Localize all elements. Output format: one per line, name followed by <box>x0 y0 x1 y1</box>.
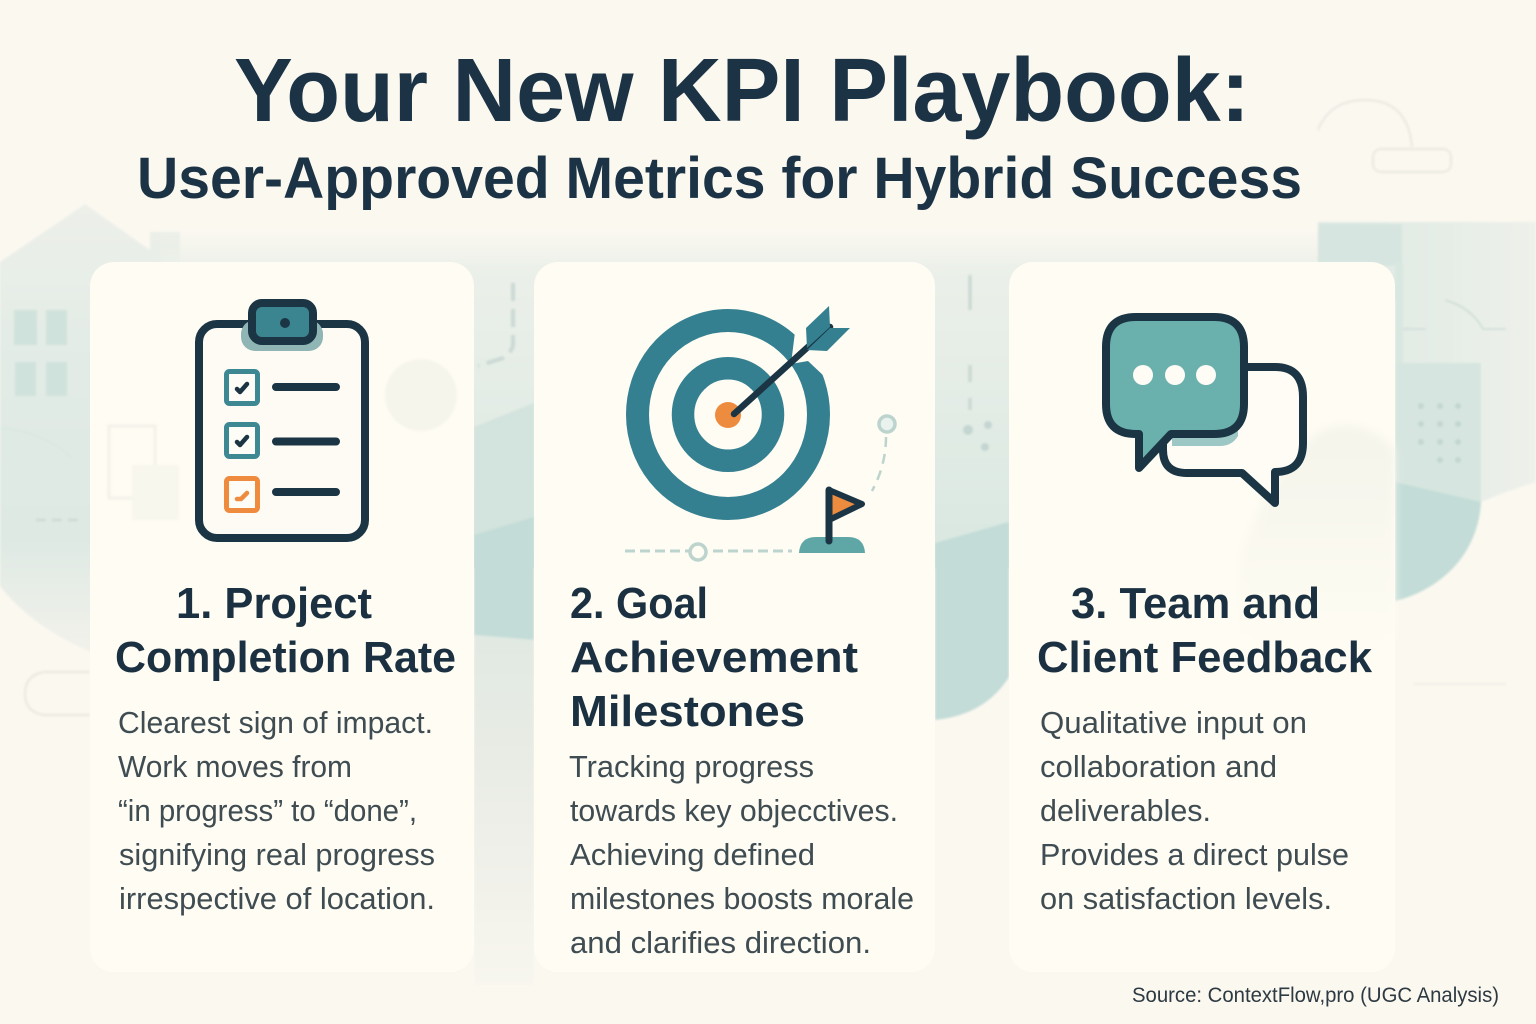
body text: Work moves from <box>118 749 352 784</box>
card background <box>534 262 935 972</box>
body text: Achieving defined <box>570 837 815 872</box>
background scene: left house <box>0 204 180 715</box>
heading <box>1037 579 1373 682</box>
heading: 1. Project <box>176 579 372 628</box>
body text: and clarifies direction. <box>570 925 871 960</box>
body text: Provides a direct pulse <box>1040 837 1349 872</box>
body text: milestones boosts morale <box>570 881 914 916</box>
body text: collaboration and <box>1040 749 1277 784</box>
body text: deliverables. <box>1040 793 1211 828</box>
card background <box>1009 262 1395 972</box>
faint card decoration <box>109 359 457 520</box>
heading: 3. Team and <box>1071 579 1320 628</box>
subtitle: User-Approved Metrics for Hybrid Success <box>137 146 1302 211</box>
body text: Clearest sign of impact. <box>118 705 433 740</box>
heading <box>570 579 858 736</box>
body text <box>569 749 914 960</box>
body text: towards key objecctives. <box>570 793 898 828</box>
heading: Milestones <box>570 687 805 736</box>
title: Your New KPI Playbook: <box>234 41 1250 141</box>
body text <box>118 705 435 916</box>
body text <box>1040 705 1349 916</box>
panel: project completion rate <box>90 262 474 972</box>
heading: Achievement <box>570 633 858 682</box>
background scene: strip between first and second cards <box>474 283 534 985</box>
body text: “in progress” to “done”, <box>118 793 417 828</box>
heading: Completion Rate <box>115 633 456 682</box>
body text: Qualitative input on <box>1040 705 1307 740</box>
icon: chat bubbles <box>1106 317 1303 503</box>
source note: Source: ContextFlow,pro (UGC Analysis) <box>1132 984 1499 1007</box>
background scene: strip between second and third cards <box>935 275 1009 720</box>
heading: Client Feedback <box>1037 633 1373 682</box>
background scene: wash above and between cards <box>160 228 1330 568</box>
body text: signifying real progress <box>119 837 435 872</box>
heading: 2. Goal <box>570 579 708 628</box>
title <box>137 41 1302 211</box>
body text: irrespective of location. <box>119 881 435 916</box>
body text: Tracking progress <box>569 749 814 784</box>
body text: on satisfaction levels. <box>1040 881 1332 916</box>
card background <box>90 262 474 972</box>
icon: target with arrow and flag <box>625 306 895 560</box>
icon: clipboard checklist <box>199 303 365 538</box>
background scene: right buildings <box>1318 100 1536 684</box>
faint card decoration <box>1240 426 1394 640</box>
heading <box>115 579 456 682</box>
panel: team and client feedback <box>1009 262 1395 972</box>
panel: goal achievement milestones <box>534 262 935 972</box>
